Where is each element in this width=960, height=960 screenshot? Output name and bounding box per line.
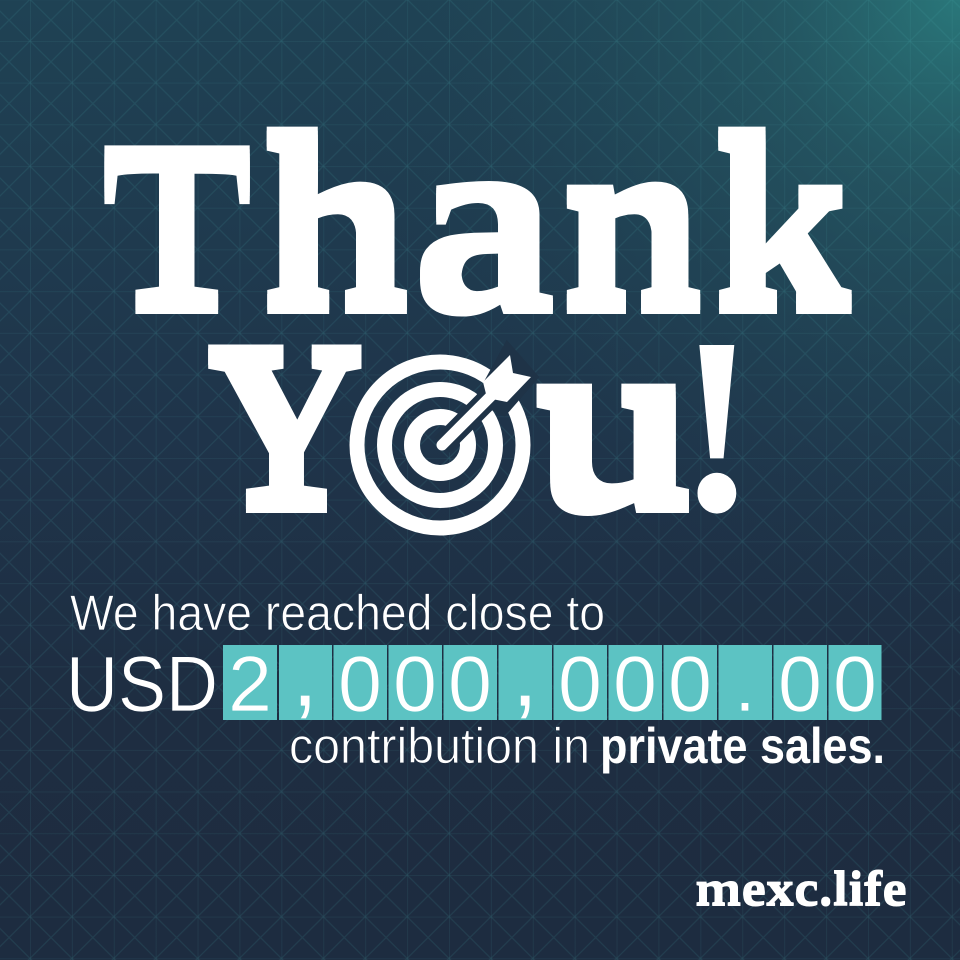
amount counter: 0 [448, 639, 492, 728]
title: Thank: k [712, 86, 852, 359]
title: You!: u [532, 286, 697, 559]
amount counter: 0 [833, 639, 877, 728]
subtitle line 3 [289, 718, 885, 774]
subtitle line 1: We have reached close to [70, 585, 605, 641]
title: Thank: a [411, 76, 557, 366]
title: Thank: n [560, 86, 704, 360]
amount counter: 2 [228, 639, 272, 728]
amount counter: 0 [393, 639, 437, 728]
amount counter: , [291, 616, 319, 728]
title: Thank [101, 76, 852, 366]
currency label: USD [66, 639, 218, 728]
amount counter: 0 [558, 639, 602, 728]
amount counter: 0 [338, 639, 382, 728]
amount counter: 0 [613, 639, 657, 728]
title: You!: Y [204, 298, 366, 556]
amount counter: , [511, 616, 539, 728]
website url: mexc.life [695, 861, 907, 916]
amount counter [223, 616, 882, 728]
title: You!: ! [677, 286, 757, 565]
subtitle line 3: contribution in [289, 718, 590, 774]
title: Thank: T [101, 98, 253, 357]
amount counter: 0 [778, 639, 822, 728]
icon: target with arrow [357, 352, 531, 528]
amount counter: . [734, 639, 756, 728]
title: You! [204, 286, 757, 565]
amount counter: 0 [668, 639, 712, 728]
subtitle line 3: private sales. [600, 718, 885, 774]
title: Thank: h [260, 87, 411, 360]
